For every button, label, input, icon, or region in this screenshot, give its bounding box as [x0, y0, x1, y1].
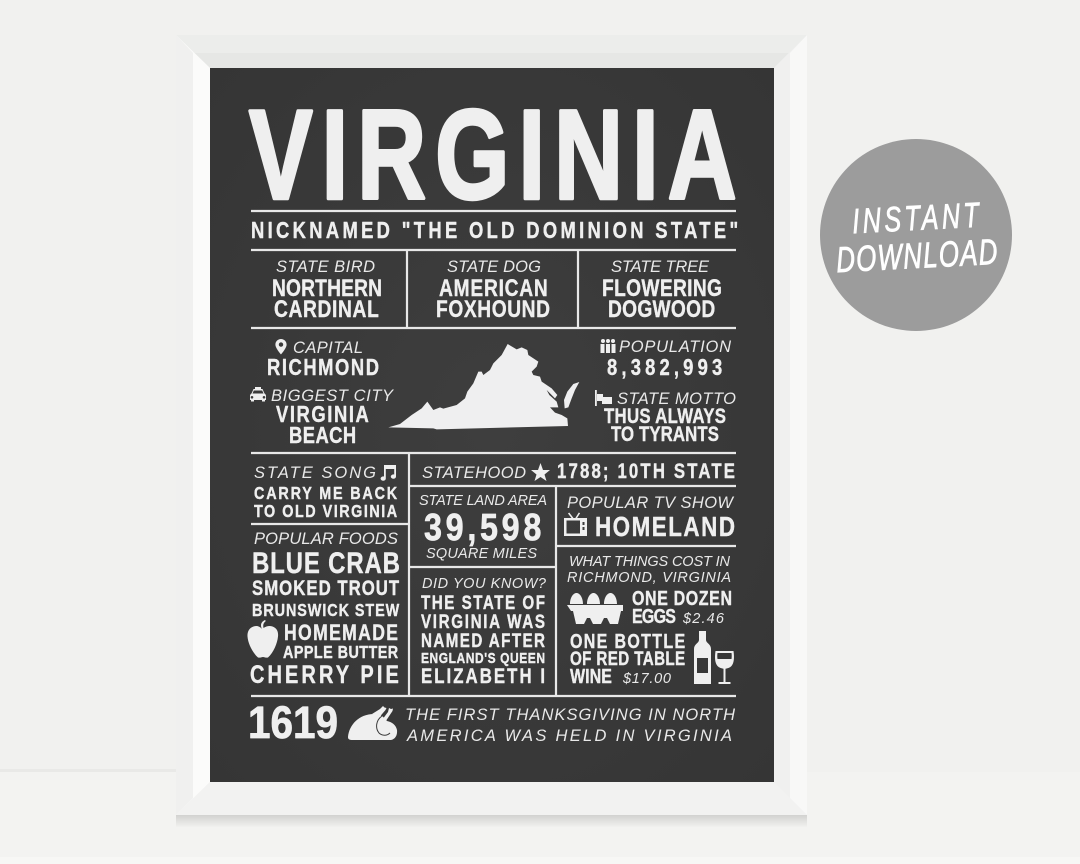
panel: popular foods: BLUE CRAB — [252, 545, 400, 580]
chalkboard poster — [210, 68, 774, 782]
icon: roast turkey — [348, 706, 397, 740]
panel: what things cost: WHAT THINGS COST IN — [569, 554, 731, 570]
panel: 1619 thanksgiving fact — [248, 698, 735, 749]
panel: population and state motto: THUS ALWAYS — [604, 405, 726, 429]
icon: taxi car — [250, 387, 266, 402]
panel: population and state motto: STATE MOTTO — [617, 390, 736, 408]
map: Virginia silhouette — [388, 344, 579, 429]
icon: star — [531, 463, 550, 481]
panel: population and state motto — [595, 338, 736, 447]
panel: state symbols: FLOWERING — [602, 274, 722, 302]
panel: popular foods: APPLE BUTTER — [283, 643, 398, 662]
panel: did you know: ENGLAND'S QUEEN — [421, 650, 545, 666]
panel: capital and biggest city: CAPITAL — [293, 339, 363, 357]
panel: popular foods: CHERRY PIE — [250, 661, 399, 689]
panel: what things cost: ONE DOZEN — [632, 587, 732, 609]
panel: popular TV show — [564, 494, 735, 543]
panel: state song — [254, 464, 397, 521]
panel: 1619 thanksgiving fact: 1619 — [248, 698, 338, 749]
icon: wine bottle — [694, 631, 711, 684]
panel: popular foods: SMOKED TROUT — [252, 577, 400, 601]
badge: instant download: INSTANT — [851, 196, 982, 241]
panel: state symbols: DOGWOOD — [608, 295, 715, 323]
panel: state symbols — [251, 250, 736, 328]
panel: did you know: DID YOU KNOW? — [422, 576, 547, 592]
nickname banner — [251, 211, 738, 250]
panel: state symbols: STATE TREE — [611, 258, 710, 276]
panel: population and state motto: POPULATION — [619, 338, 731, 356]
panel: what things cost: RICHMOND, VIRGINIA — [567, 570, 731, 586]
panel: state symbols: NORTHERN — [272, 274, 382, 302]
panel: state symbols: STATE DOG — [447, 258, 541, 276]
panel: did you know: NAMED AFTER — [421, 629, 546, 651]
panel: statehood — [422, 460, 735, 484]
nickname banner: NICKNAMED "THE OLD DOMINION STATE" — [251, 218, 738, 244]
panel: what things cost: OF RED TABLE — [570, 647, 685, 669]
panel: capital and biggest city — [250, 339, 394, 449]
panel: statehood: 1788; 10TH STATE — [557, 460, 735, 484]
panel: 1619 thanksgiving fact: THE FIRST THANKSGIVING IN NORTH — [405, 706, 735, 724]
panel: state song: STATE SONG — [254, 464, 376, 482]
panel: state song: TO OLD VIRGINIA — [254, 502, 397, 521]
badge: instant download — [820, 139, 1012, 331]
icon: apple — [247, 620, 278, 658]
panel: statehood: STATEHOOD — [422, 464, 526, 482]
panel: state symbols: FOXHOUND — [436, 295, 550, 323]
panel: capital and biggest city: VIRGINIA — [276, 402, 369, 428]
panel: what things cost: $2.46 — [682, 611, 725, 627]
panel: did you know: VIRGINIA WAS — [421, 610, 545, 632]
icon: music note — [381, 465, 396, 481]
panel: state song: CARRY ME BACK — [254, 484, 397, 503]
panel: did you know — [421, 576, 547, 689]
panel: population and state motto: 8,382,993 — [607, 355, 722, 381]
panel: what things cost: $17.00 — [622, 671, 671, 687]
panel: what things cost — [567, 554, 734, 687]
panel: popular foods: POPULAR FOODS — [254, 530, 398, 548]
icon: group of people — [600, 339, 616, 353]
panel: what things cost: WINE — [570, 665, 612, 687]
panel: did you know: THE STATE OF — [421, 591, 545, 613]
panel: capital and biggest city: RICHMOND — [267, 355, 379, 381]
title: VIRGINIA — [249, 83, 736, 226]
icon: wine glass — [715, 651, 734, 684]
panel: popular foods — [247, 530, 400, 689]
picture frame — [176, 35, 807, 815]
badge: instant download: DOWNLOAD — [835, 232, 998, 280]
panel: land area: STATE LAND AREA — [419, 493, 547, 509]
panel: capital and biggest city: BIGGEST CITY — [271, 387, 394, 405]
panel grid lines — [251, 453, 736, 696]
panel: land area: 39,598 — [424, 507, 541, 549]
panel: popular foods: HOMEMADE — [284, 621, 398, 646]
icon: flag — [595, 390, 612, 406]
panel: state symbols: STATE BIRD — [276, 258, 375, 276]
panel: state symbols: AMERICAN — [439, 274, 548, 302]
panel: 1619 thanksgiving fact: AMERICA WAS HELD IN VIRGINIA — [406, 727, 732, 745]
panel: popular TV show: HOMELAND — [595, 512, 735, 543]
panel: what things cost: ONE BOTTLE — [570, 630, 685, 652]
panel: popular TV show: POPULAR TV SHOW — [567, 494, 734, 512]
icon: egg carton — [567, 593, 623, 624]
panel: what things cost: EGGS — [632, 605, 676, 627]
icon: television — [564, 512, 587, 536]
panel: state symbols: CARDINAL — [274, 295, 379, 323]
icon: map pin — [275, 339, 287, 354]
panel: population and state motto: TO TYRANTS — [611, 423, 719, 447]
panel: land area — [419, 493, 547, 562]
panel: did you know: ELIZABETH I — [421, 665, 545, 689]
panel: popular foods: BRUNSWICK STEW — [252, 601, 400, 620]
panel: land area: SQUARE MILES — [426, 546, 537, 562]
panel: capital and biggest city: BEACH — [289, 423, 356, 449]
